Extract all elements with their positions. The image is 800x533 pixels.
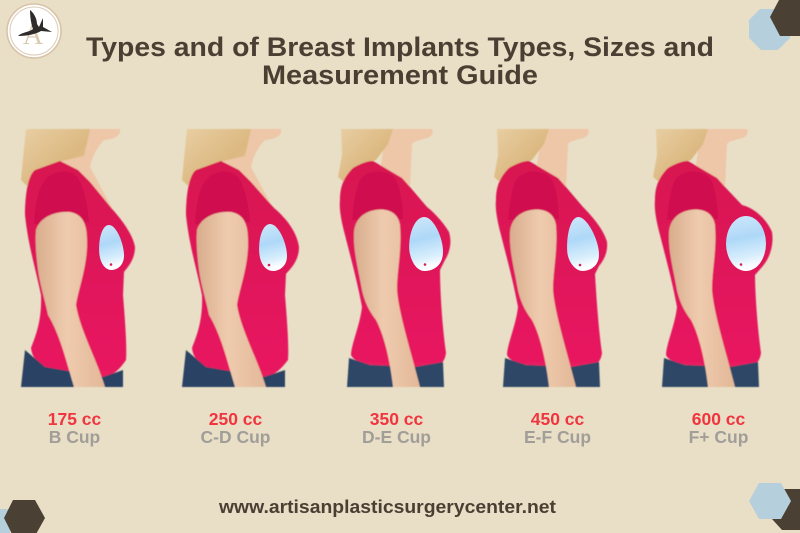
title [86, 32, 714, 90]
title: Measurement Guide [262, 60, 538, 90]
label: 350 cc D-E Cup: 350 cc [370, 409, 424, 429]
label: 350 cc D-E Cup [362, 409, 431, 447]
label: 175 cc B Cup: B Cup [49, 427, 100, 447]
decoration: bottom right hexagons [749, 483, 800, 530]
title: Types and of Breast Implants Types, Sizes and [86, 32, 714, 62]
label: 175 cc B Cup [48, 409, 102, 447]
label: 450 cc E-F Cup: E-F Cup [524, 427, 591, 447]
decoration: top right hexagons [749, 0, 800, 50]
label: 450 cc E-F Cup: 450 cc [531, 409, 585, 429]
logo [7, 4, 61, 58]
website footer: www.artisanplasticsurgerycenter.net [218, 497, 556, 517]
label: 600 cc F+ Cup: F+ Cup [689, 427, 748, 447]
figure 1: 175 cc [21, 129, 135, 387]
label: 250 cc C-D Cup: C-D Cup [201, 427, 270, 447]
label: 600 cc F+ Cup [689, 409, 748, 447]
figure 2: 250 cc [182, 129, 299, 387]
label: 600 cc F+ Cup: 600 cc [692, 409, 746, 429]
figure 4: 450 cc [494, 129, 607, 387]
label: 250 cc C-D Cup [201, 409, 270, 447]
figure 5: 600 cc [653, 129, 773, 387]
label: 450 cc E-F Cup [524, 409, 591, 447]
logo: A [23, 20, 44, 51]
figure 3: 350 cc [338, 129, 450, 387]
label: 250 cc C-D Cup: 250 cc [209, 409, 263, 429]
label: 175 cc B Cup: 175 cc [48, 409, 102, 429]
decoration: bottom left hexagons [0, 500, 45, 533]
label: 350 cc D-E Cup: D-E Cup [362, 427, 431, 447]
